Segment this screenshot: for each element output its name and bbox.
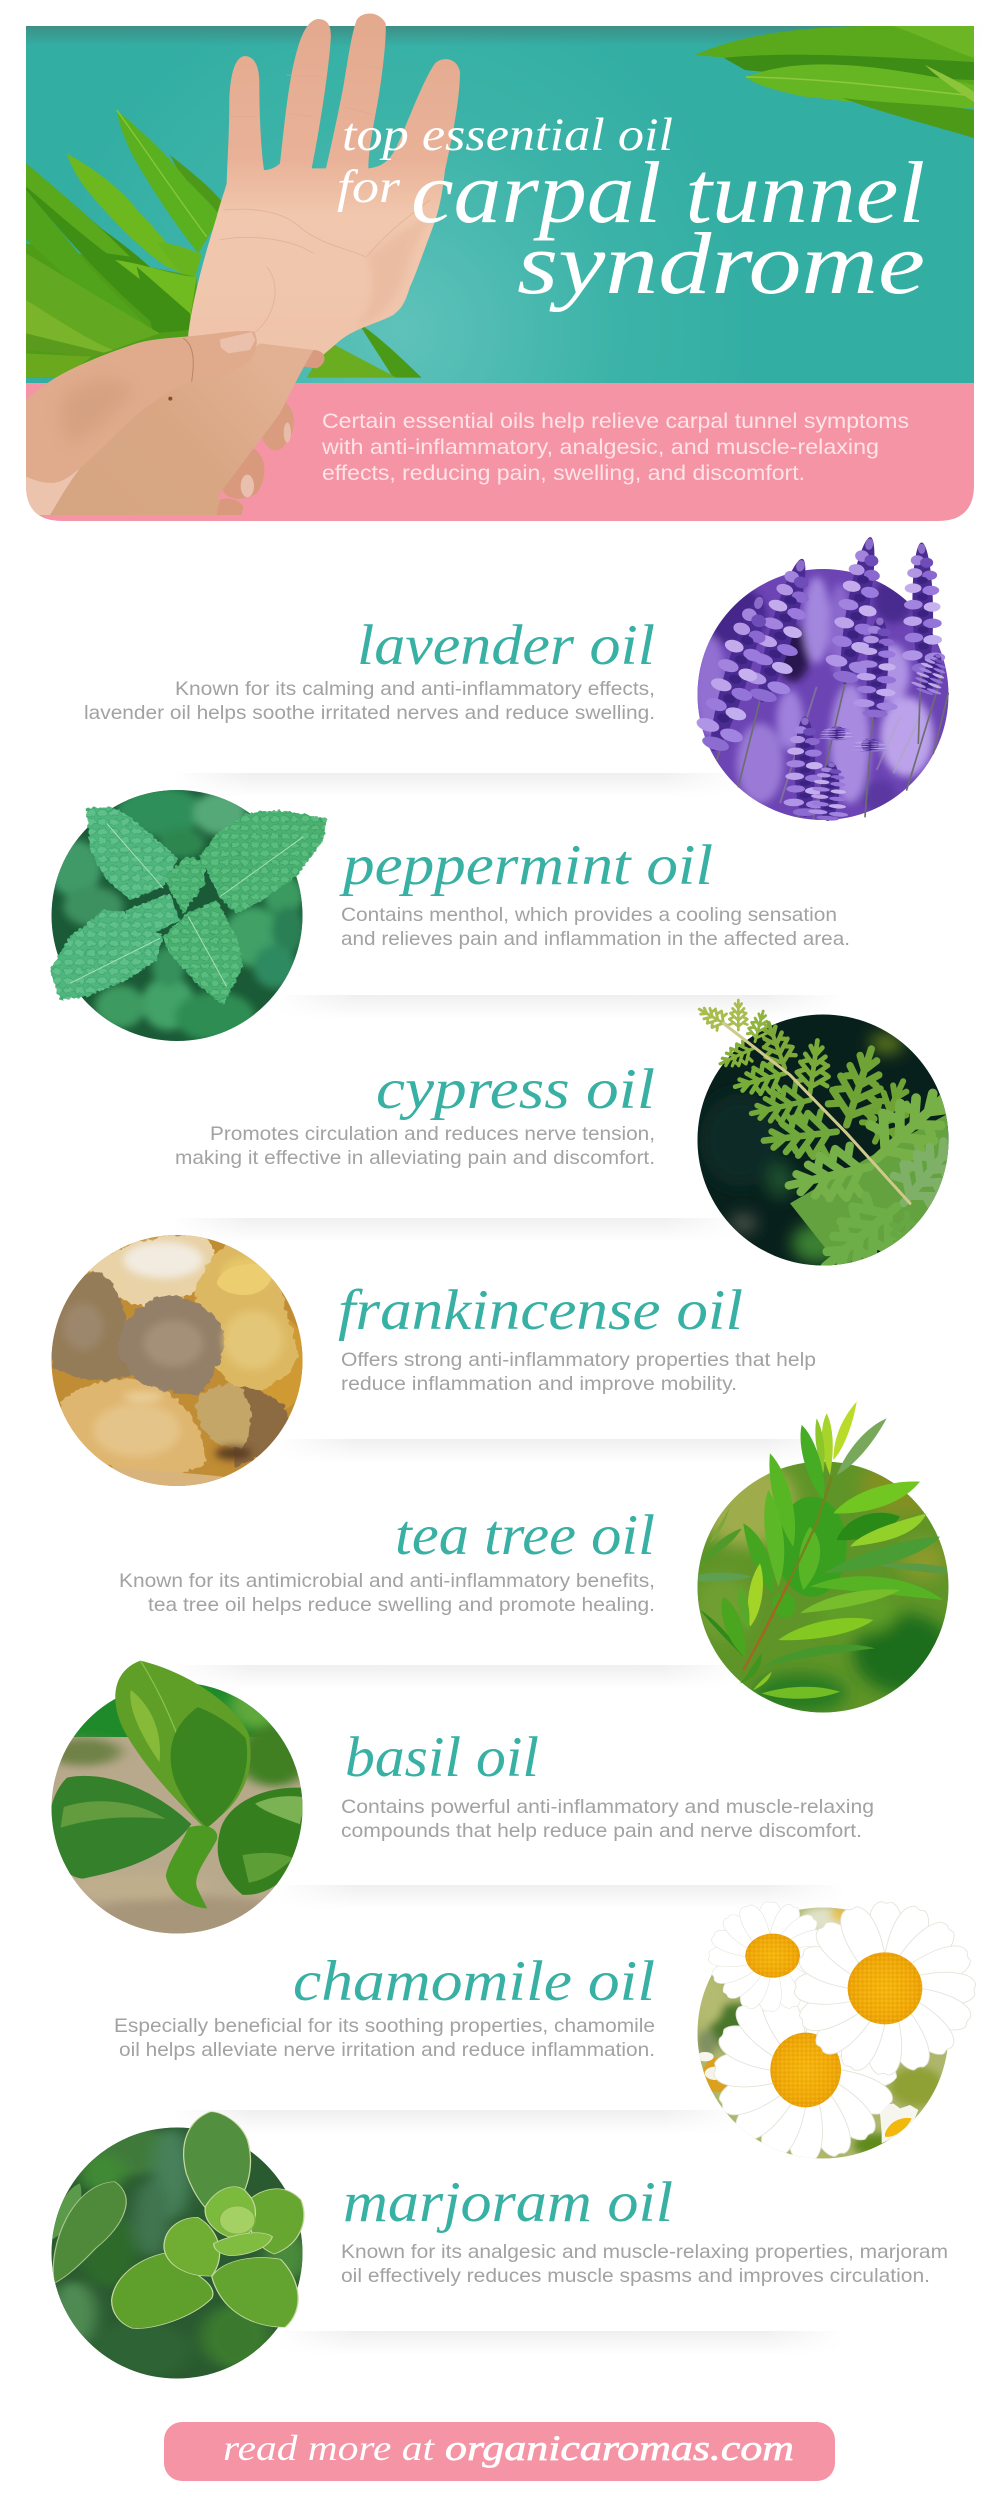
description (175, 1123, 655, 1169)
heading: tea tree oil (395, 1504, 655, 1567)
call to action button: organicaromas.com (445, 2428, 794, 2468)
panel: frankincense oil (49, 1233, 845, 1493)
description: oil effectively reduces muscle spasms and improves circulation. (341, 2265, 930, 2287)
intro text (321, 410, 909, 485)
small background flower (703, 2058, 728, 2092)
description: Promotes circulation and reduces nerve tension, (210, 1123, 655, 1145)
heading: lavender oil (357, 614, 655, 677)
photo: tea tree (693, 1402, 953, 1716)
description (341, 904, 850, 950)
description (84, 678, 655, 724)
description: Known for its calming and anti-inflammatory effects, (175, 678, 655, 700)
description (341, 1796, 874, 1842)
description: tea tree oil helps reduce swelling and promote healing. (148, 1594, 655, 1616)
heading: peppermint oil (339, 834, 713, 897)
fingers behind wrist (303, 350, 324, 368)
description: lavender oil helps soothe irritated nerves and reduce swelling. (84, 702, 655, 724)
description: reduce inflammation and improve mobility. (341, 1373, 737, 1395)
lower flower (714, 2000, 897, 2158)
heading: chamomile oil (293, 1950, 655, 2013)
leaves left of hand (26, 110, 422, 378)
hand holding wrist (26, 14, 460, 515)
heading: marjoram oil (343, 2171, 673, 2234)
description (341, 2241, 948, 2287)
description (114, 2015, 655, 2061)
photo: lavender (696, 537, 950, 821)
heading: cypress oil (376, 1058, 655, 1121)
banner teal background (10, 26, 990, 383)
panel: cypress oil (172, 1000, 976, 1288)
description: and relieves pain and inflammation in the affected area. (341, 928, 850, 950)
description: Known for its antimicrobial and anti-inflammatory benefits, (119, 1570, 655, 1592)
intro text: with anti-inflammatory, analgesic, and muscle-relaxing (321, 436, 879, 459)
photo: peppermint (48, 787, 327, 1042)
description: oil helps alleviate nerve irritation and reduce inflammation. (119, 2039, 655, 2061)
palm creases (220, 63, 430, 333)
description: compounds that help reduce pain and nerve discomfort. (341, 1820, 862, 1842)
panel: chamomile oil (114, 1902, 976, 2162)
banner pink strip (26, 383, 974, 521)
intro text: effects, reducing pain, swelling, and discomfort. (322, 462, 805, 485)
description (341, 1349, 816, 1395)
panel: peppermint oil (48, 787, 850, 1042)
description: Offers strong anti-inflammatory properties that help (341, 1349, 816, 1371)
description: Contains menthol, which provides a cooling sensation (341, 904, 837, 926)
panel: tea tree oil (119, 1402, 953, 1716)
photo: marjoram (50, 2112, 309, 2381)
heading: frankincense oil (338, 1279, 743, 1342)
photo: basil (45, 1661, 313, 1938)
title: top essential oil (342, 109, 673, 161)
description: Especially beneficial for its soothing properties, chamomile (114, 2015, 655, 2037)
call to action button: read more at (223, 2428, 435, 2468)
title: carpal tunnel (411, 145, 925, 242)
base of gripping palm (26, 468, 80, 515)
leaves top right (695, 26, 974, 138)
tiny flower (880, 2103, 918, 2143)
intro text: Certain essential oils help relieve carpal tunnel symptoms (322, 410, 909, 433)
title: for (337, 161, 401, 213)
description (119, 1570, 655, 1616)
title (337, 109, 925, 313)
description: making it effective in alleviating pain and discomfort. (175, 1147, 655, 1169)
title: syndrome (517, 216, 925, 313)
panel: lavender oil (84, 533, 960, 830)
raised hand (187, 14, 460, 363)
photo: frankincense (49, 1233, 307, 1493)
panel: header banner (10, 14, 990, 521)
description: Contains powerful anti-inflammatory and muscle-relaxing (341, 1796, 874, 1818)
forearm (50, 343, 313, 515)
panel: marjoram oil (50, 2112, 948, 2381)
description: Known for its analgesic and muscle-relaxing properties, marjoram (341, 2241, 948, 2263)
gripping hand (26, 331, 257, 483)
heading: basil oil (345, 1726, 539, 1789)
call to action button (164, 2422, 835, 2481)
photo: chamomile (695, 1902, 976, 2162)
panel: basil oil (45, 1661, 874, 1938)
photo: cypress (698, 998, 948, 1266)
